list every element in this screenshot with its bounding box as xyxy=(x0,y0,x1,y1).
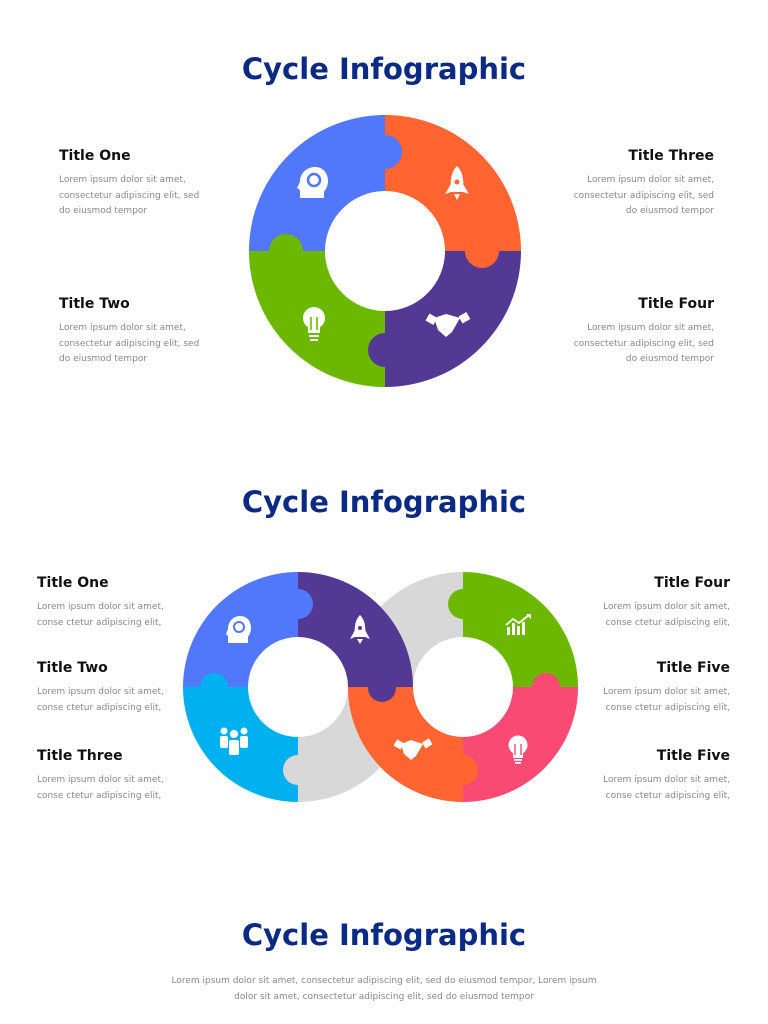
icon: chart xyxy=(506,614,531,635)
text: title one: Title One xyxy=(59,148,131,164)
icon: bulb xyxy=(303,307,325,341)
text: left title three xyxy=(37,748,164,800)
text: title three: Title Three xyxy=(628,148,714,164)
text: title two: do eiusmod tempor xyxy=(59,354,147,364)
text: right title five b: Title Five xyxy=(657,748,730,764)
text: right title five xyxy=(603,660,730,712)
text: left title two xyxy=(37,660,164,712)
text: left title one: conse ctetur adipiscing elit, xyxy=(37,618,161,628)
text: title three: Lorem ipsum dolor sit amet, xyxy=(587,175,714,185)
icon: head gear xyxy=(297,167,328,198)
text: footer paragraph: dolor sit amet, consectetur adipiscing elit, sed do eiusmod tempor xyxy=(234,992,534,1002)
text: left title three: Title Three xyxy=(37,748,123,764)
text: left title two: Title Two xyxy=(37,660,108,676)
text: title four: consectetur adipiscing elit, sed xyxy=(574,338,714,348)
text: left title three: Lorem ipsum dolor sit amet, xyxy=(37,775,164,785)
text: left title one: Lorem ipsum dolor sit amet, xyxy=(37,602,164,612)
text: title four: do eiusmod tempor xyxy=(626,354,714,364)
icon: rocket xyxy=(445,166,469,200)
text: title one: do eiusmod tempor xyxy=(59,206,147,216)
text: right title four: Lorem ipsum dolor sit amet, xyxy=(603,602,730,612)
icon: people xyxy=(220,728,248,755)
text: right title five b: conse ctetur adipiscing elit, xyxy=(606,790,730,800)
text: title three: do eiusmod tempor xyxy=(626,206,714,216)
text: title four: Title Four xyxy=(638,296,714,312)
text: right title five: Title Five xyxy=(657,660,730,676)
text: title two: Lorem ipsum dolor sit amet, xyxy=(59,323,186,333)
text: title four xyxy=(574,296,714,364)
text: title one xyxy=(59,148,199,216)
text: title two xyxy=(59,296,199,364)
text: footer paragraph xyxy=(171,976,597,1002)
text: left title two: conse ctetur adipiscing elit, xyxy=(37,702,161,712)
text: title one: Lorem ipsum dolor sit amet, xyxy=(59,175,186,185)
text: footer paragraph: Lorem ipsum dolor sit amet, consectetur adipiscing elit, sed do eiusmod tempor, Lorem ipsum xyxy=(171,976,597,986)
cycle diagram 1 xyxy=(249,115,521,387)
text: right title five b xyxy=(603,748,730,800)
text: left title two: Lorem ipsum dolor sit amet, xyxy=(37,687,164,697)
icon: bulb 2 xyxy=(508,736,528,764)
text: right title four: conse ctetur adipiscing elit, xyxy=(606,618,730,628)
text: title two: consectetur adipiscing elit, sed xyxy=(59,338,199,348)
text: left title one xyxy=(37,575,164,628)
icon: rocket 2 xyxy=(350,615,370,644)
text: right title four xyxy=(603,575,730,628)
icon: handshake 2 xyxy=(394,738,432,760)
text: title three xyxy=(574,148,714,216)
icon: head gear 2 xyxy=(226,616,251,643)
text: title two: Title Two xyxy=(59,296,130,312)
title 3: Cycle Infographic xyxy=(242,918,526,952)
text: right title four: Title Four xyxy=(654,575,730,591)
icon: handshake xyxy=(426,312,470,337)
text: title three: consectetur adipiscing elit, sed xyxy=(574,190,714,200)
text: left title three: conse ctetur adipiscing elit, xyxy=(37,790,161,800)
title 2: Cycle Infographic xyxy=(242,485,526,519)
text: right title five b: Lorem ipsum dolor sit amet, xyxy=(603,775,730,785)
title 1: Cycle Infographic xyxy=(242,52,526,86)
text: title four: Lorem ipsum dolor sit amet, xyxy=(587,323,714,333)
text: right title five: conse ctetur adipiscing elit, xyxy=(606,702,730,712)
text: title one: consectetur adipiscing elit, sed xyxy=(59,190,199,200)
text: left title one: Title One xyxy=(37,575,109,591)
text: right title five: Lorem ipsum dolor sit amet, xyxy=(603,687,730,697)
